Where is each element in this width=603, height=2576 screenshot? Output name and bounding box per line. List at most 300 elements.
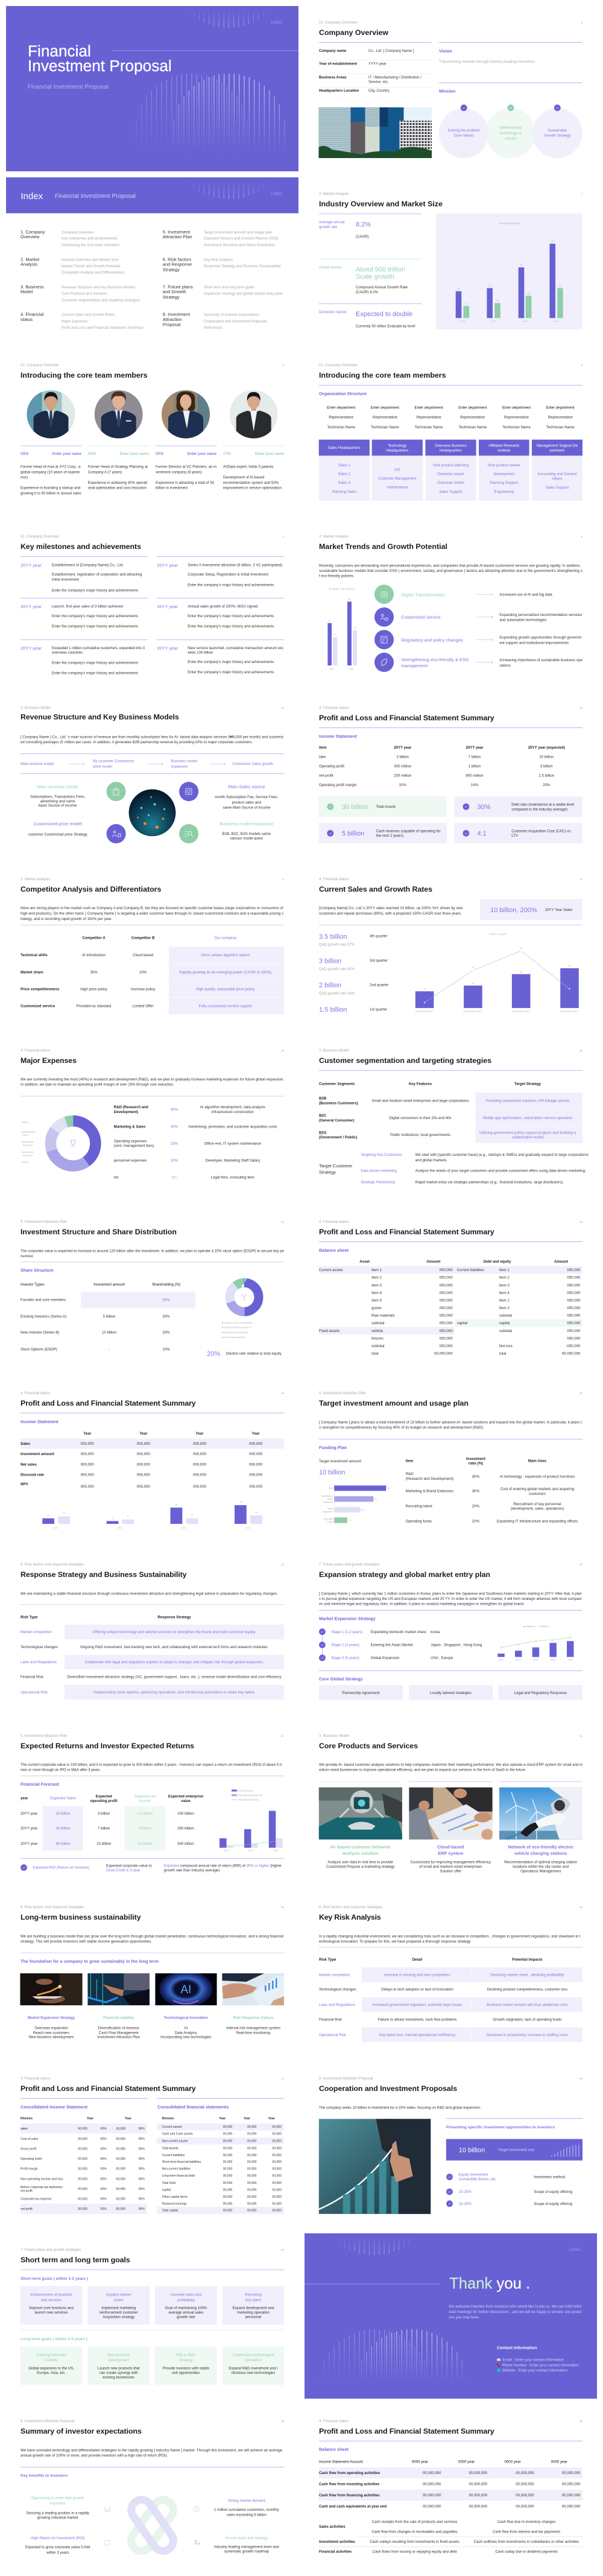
slide: organization structure: 6 — [581, 364, 582, 367]
combo chart: sales and growth: 4th quarter of 20YY — [560, 1010, 579, 1012]
table: consolidated financial: 00,000 — [272, 2188, 282, 2192]
intro paragraph: [ Company Name ] plans to attract a total investment of 10 billion to further advance AI- based solutions and expand into the global market. In particular, it plans t — [319, 1420, 582, 1424]
legend — [222, 1322, 252, 1339]
table: consolidated financial: 00,000 — [247, 2209, 257, 2213]
table: yearly income: 000,000 — [81, 1473, 94, 1477]
text: business model expansion: various model quest — [230, 837, 263, 841]
table: consolidated income: 00% — [139, 2187, 145, 2191]
department table: Enter department — [502, 405, 531, 410]
milestone right 2: Enter the company's major history and achievements — [188, 624, 274, 629]
index left column: Customer segmentation and targeting strategies — [62, 299, 140, 303]
icon: main sales — [179, 782, 198, 801]
table: competitors: Competitor B — [131, 936, 155, 941]
table: segments: B2B — [319, 1097, 327, 1101]
table: income statement — [319, 746, 565, 787]
table: yearly income: 000,000 — [137, 1473, 151, 1477]
table: consolidated financial: 00,000 — [223, 2125, 232, 2129]
table: balance sheet: Debt and equity — [484, 1260, 511, 1264]
table: share structure: 20% — [162, 1331, 170, 1335]
company facts: IT / Manufacturing / Distribution / — [368, 75, 421, 80]
legend: ■ Founders and Core Members — [222, 1322, 252, 1324]
slide: income statement by year: 16 — [281, 1392, 284, 1395]
table: segments: B2C — [319, 1114, 327, 1118]
ROI summary: Expected ROI (Return on Investor) — [33, 1866, 89, 1870]
table: consolidated financial: Current liabilities — [162, 2154, 185, 2157]
closing message: We welcome inquiries from investors who would like to join us. We can hold indivi — [449, 2305, 581, 2309]
index left column: Industry Overview and Market Size — [62, 258, 119, 262]
table: segments — [319, 1082, 582, 1143]
table: consolidated financial: Long-term financial debt — [162, 2174, 195, 2178]
slide: expansion strategy: 27 — [579, 1563, 582, 1566]
table: consolidated income: 00% — [139, 2168, 145, 2171]
table: risks: Decrease in productivity, increase in staffing costs — [487, 2033, 568, 2037]
table: yearly income: 000,000 — [193, 1452, 207, 1456]
mission circles: Core Values — [454, 134, 474, 138]
KPI: cash reserves: the next 2 years) — [376, 834, 403, 838]
KPI: CAC vs LTV: Customer Acquisition Cost (CAC) vs. — [511, 829, 572, 834]
table: consolidated income: 00,000 — [116, 2197, 125, 2201]
table: segments: Target Strategy — [514, 1082, 541, 1087]
org column: management: Accounting and General — [537, 472, 577, 477]
table: balance sheet: total — [371, 1351, 379, 1356]
photo: meeting documents — [409, 1787, 493, 1840]
trend: customized service — [374, 608, 582, 627]
table: expenses: AI algorithm development, data analysis — [200, 1105, 265, 1109]
slide: industry overview: 2. Market Analysis — [319, 192, 349, 196]
strategy boxes: Legal and Regulatory Response — [514, 1691, 567, 1695]
milestone right 3: Enter the company's major history and achievements — [188, 660, 274, 664]
index right column: Strategy — [163, 294, 180, 300]
stat: global market — [319, 265, 408, 294]
decorative domes — [319, 2329, 467, 2414]
combo chart: expansion: 20YY — [499, 1659, 504, 1661]
quarterly figures: 2nd quarter — [370, 983, 388, 987]
table: yearly income: 000,000 — [137, 1485, 151, 1489]
table: consolidated financial: Year — [244, 2117, 250, 2121]
slide: core products: 11 — [579, 1734, 582, 1737]
benefit: market demand: Strong market demand — [228, 2499, 265, 2503]
term: equity scope 2 — [446, 2200, 572, 2207]
timeline stages: Global Expansion — [371, 1656, 400, 1660]
icon: coin — [194, 2506, 199, 2511]
mission circles: Growth Strategy — [544, 134, 571, 138]
term: investment method: Equity Investment — [459, 2172, 488, 2177]
member: CEO: Experience in founding a startup and — [21, 486, 80, 490]
table: risks: Increase in existing and new competitors — [384, 1973, 450, 1977]
table: consolidated income: 00,000 — [116, 2168, 125, 2171]
target customer strategy: Analyze the needs of your target customers and provide customized offers using data-driven marketing. — [415, 1169, 586, 1173]
table: expenses: Developer, Marketing Staff Salary — [205, 1158, 260, 1163]
table: balance sheet: Item 3 — [371, 1283, 382, 1287]
table: income statement: 10% — [399, 783, 406, 787]
KPI: debt ratio: Debt ratio (maintained at a stable level — [511, 802, 574, 807]
stat: domestic market: Domestic market — [319, 310, 347, 314]
interlocked knot — [127, 2496, 177, 2555]
photo: hands with report — [222, 1973, 284, 2005]
table: yearly income: 000,000 — [193, 1473, 207, 1477]
index left column: Model — [21, 289, 33, 294]
photo: AI ring — [155, 1973, 217, 2005]
long-term goals cards: development — [108, 2358, 129, 2362]
table: consolidated financial: 00,000 — [272, 2160, 282, 2164]
table: expenses: infrastructure construction — [212, 1110, 254, 1114]
KPI: total assets: Total Assets — [376, 805, 396, 809]
index right column: References — [204, 326, 223, 330]
bar chart: yearly — [42, 1501, 262, 1529]
slide: investor summary: 28 — [281, 2420, 284, 2423]
slide: core team members: 01. Company Overview — [21, 363, 59, 367]
slide: income statement with KPIs: 15 — [579, 706, 582, 709]
slide: expected returns — [21, 1734, 284, 1873]
term: investment method: Convertible Bonds, etc. — [459, 2177, 497, 2181]
timeline stages: Entering the Asian Market — [371, 1643, 413, 1648]
contact information: Email : Enter your contact information — [503, 2358, 564, 2362]
callout: dilution: 20% — [207, 1350, 220, 1357]
trend: ESG: Increasing importance of sustainable business ope — [499, 658, 583, 662]
short-term goals cards: average annual sales — [168, 2311, 203, 2315]
table: risks: Detail — [412, 1958, 423, 1962]
table: response strategy: Risk Type — [21, 1615, 38, 1619]
index left column: 4. Financial — [21, 312, 44, 317]
benefit: proven team: Industry-leading management team and — [214, 2545, 279, 2549]
activities breakdown: Sales activities — [319, 2525, 346, 2529]
table: balance sheet: 00,000,000 — [434, 1351, 453, 1356]
table: balance sheet — [319, 1260, 582, 1356]
section heading: Market Expansion Strategy — [319, 1616, 376, 1622]
table: income statement: 2.5 billion — [538, 773, 554, 778]
pillar: technological innovation: Technological innovation — [164, 2016, 208, 2020]
table: balance sheet: Item 1 — [499, 1298, 510, 1303]
table: funding uses: 10% — [472, 1520, 480, 1524]
contact information: Website : Enter your contact information — [502, 2368, 567, 2373]
milestone left 2: Launch, first year sales of 3 billion achieved — [52, 604, 123, 609]
mission circles: Differentiated — [500, 126, 522, 130]
slide: thank you — [305, 2233, 597, 2414]
short-term goals cards: profitability — [177, 2298, 195, 2302]
index right column: Attraction — [163, 317, 182, 322]
department table: Representative — [417, 416, 441, 420]
index left column: Company Overview — [62, 230, 94, 235]
legend — [22, 1121, 36, 1163]
activities breakdown: Cash flows from issuing or repaying equity and debt — [373, 2550, 457, 2554]
index right column: 7. Future plans — [163, 284, 193, 290]
table: response strategy: Laws and Regulations — [21, 1660, 57, 1664]
table: expenses: 15% — [171, 1141, 178, 1146]
milestone right 3 — [157, 646, 283, 674]
section heading: income: Consolidated Income Statement — [21, 2104, 88, 2110]
long-term goals cards: existing businesses — [103, 2376, 134, 2379]
company facts: Company name — [319, 49, 347, 53]
member: CEO: global company (10 years of experie — [21, 470, 80, 474]
pillar: market expansion: Overseas expansion — [34, 2026, 68, 2031]
slide: response strategy: 24 — [281, 1563, 284, 1566]
slide: consolidated statements: 4. Financial status — [21, 2076, 50, 2081]
table: consolidated financial: 00,000 — [247, 2181, 257, 2185]
table: consolidated income: 00,000 — [116, 2187, 125, 2191]
pillar: technological innovation: Data Analysis — [175, 2031, 197, 2035]
table: consolidated financial: 00,000 — [223, 2188, 232, 2192]
milestone right 3: 20YY year — [157, 646, 178, 651]
table: income statement: 200 million — [394, 773, 411, 778]
table: balance sheet: 000,000 — [567, 1314, 581, 1318]
heading: Introducing the core team members — [21, 371, 148, 379]
decorative domes — [136, 74, 285, 158]
table: balance sheet: 000,000 — [440, 1276, 453, 1280]
slide: income statement by year: 4. Financial status — [21, 1391, 50, 1395]
activities breakdown: Cash flow from changes in receivables and payables — [371, 2530, 458, 2534]
horizontal bar chart: funding: 20 — [362, 1509, 364, 1511]
index left column: Major Expenses — [62, 319, 88, 323]
milestone left 1: Establishment, registration of corporation and attracting — [52, 573, 142, 577]
timeline stages: Japan , Singapore , Hong Kong — [431, 1643, 482, 1648]
table: cash flow: 00,000,000 — [469, 2505, 488, 2508]
index right column: Proposal — [163, 322, 181, 328]
table: consolidated income: 00% — [100, 2168, 107, 2171]
intro paragraph: The company seeks 10 billion in investment for a 15% stake, focusing on R&D and global expansion. — [319, 2106, 481, 2110]
product: EV charging: Network of eco-friendly electric — [508, 1844, 573, 1850]
table: funding uses: Recruitment of key personnel — [513, 1502, 561, 1506]
legend: Expenses — [23, 1155, 33, 1157]
table: consolidated financial: 00,000 — [223, 2203, 232, 2206]
table: consolidated financial: 00,000 — [223, 2146, 232, 2150]
table: consolidated financial: 00,000 — [247, 2160, 257, 2164]
intro paragraph — [319, 563, 583, 578]
business model flow: Continuous Sales growth — [232, 762, 273, 766]
table: consolidated income: Gross profit — [21, 2147, 37, 2151]
intro paragraph: [ Company Name ] Co., Ltd. 's main sources of revenue are from monthly subscription fees for AI- based data analysis services (₩8,000 per month) and customiz — [21, 735, 283, 739]
table: yearly income: Year — [196, 1432, 204, 1436]
member: COO: Experience in achieving 30% operati — [88, 481, 147, 485]
activities breakdown: Cash receipts from the sale of products and services — [372, 2520, 457, 2524]
short-term goals cards: Enhancement of products — [30, 2292, 72, 2297]
table: expenses: 5% — [171, 1176, 177, 1180]
table: consolidated financial: 00,000 — [272, 2133, 282, 2136]
department table: Representative — [373, 416, 397, 420]
table: balance sheet: capital — [499, 1321, 510, 1325]
combo chart: forecast: Expected Net Income — [238, 1798, 259, 1801]
combo chart: sales and growth: 2nd quarter of 20YY — [463, 1010, 483, 1012]
table: expenses: Office rent, IT system maintenance — [204, 1141, 262, 1146]
long-term goals cards: innovation — [245, 2358, 262, 2362]
heading: Cooperation and Investment Proposals — [319, 2084, 457, 2093]
slide: investment structure — [21, 1220, 285, 1357]
combo chart: sales and growth: ■ sales ─ growth — [490, 933, 506, 935]
slide: market trends — [319, 535, 583, 672]
bar chart: market size: 8 — [466, 303, 467, 305]
quarterly figures: QoQ growth rate 50% — [319, 967, 355, 971]
product: EV charging: Recommendation of optimal charging station — [504, 1860, 577, 1864]
table: share structure: Existing Investors (Series A) — [21, 1315, 66, 1319]
slide: milestones: 4 — [282, 535, 284, 538]
index left column: Key milestones and achievements — [62, 236, 117, 241]
table: balance sheet: Item 1 — [499, 1268, 510, 1272]
table: forecast: 20YY year — [21, 1812, 37, 1816]
table: funding uses: ratio (%) — [469, 1461, 483, 1465]
section heading: Presenting specific investment opportunities to investors — [446, 2125, 555, 2130]
stat: domestic market: Currently 50 trillion Evaluate by level — [356, 325, 415, 328]
table: forecast: Expected net — [134, 1794, 156, 1798]
table: balance sheet: Net loss — [499, 1344, 513, 1348]
benefit: ROI: within 3 years — [46, 2551, 69, 2555]
milestone left 1 — [21, 563, 142, 592]
heading: Customer segmentation and targeting strategies — [319, 1056, 491, 1065]
slide: expansion strategy — [319, 1562, 582, 1700]
table: share structure: Stock Options (ESOP) — [21, 1348, 57, 1351]
table: income statement: 15 billion — [539, 755, 554, 759]
table: balance sheet: Fixed assets — [319, 1329, 339, 1333]
target customer strategy: Target Customer — [319, 1163, 353, 1169]
table: consolidated income: 00% — [139, 2197, 145, 2201]
business model flow: price model — [93, 765, 112, 769]
bar chart: yearly: 10 — [191, 1514, 193, 1517]
cover subtitle: Financial Investment Proposal — [28, 84, 109, 90]
department table: Technician Name — [546, 425, 575, 430]
bar chart: yearly: 5 — [112, 1517, 113, 1519]
product: ERP — [411, 1844, 491, 1874]
table: cash flow: 0000 year — [458, 2460, 475, 2464]
stat: CAGR: growth rate — [319, 225, 338, 229]
org column: research — [479, 440, 529, 501]
slide: key risk analysis — [319, 1905, 582, 2042]
table: balance sheet: Amount — [554, 1260, 568, 1264]
table: consolidated income: Operating profit — [21, 2157, 42, 2161]
milestone left 2: 20YY year — [21, 604, 42, 609]
bar chart: trends: year — [350, 668, 354, 670]
org column: management — [532, 440, 582, 501]
logo: LOGO — [271, 21, 282, 25]
table: cash flow: 00,000,000 — [562, 2505, 581, 2508]
table: balance sheet: 000,000 — [567, 1291, 581, 1295]
long-term goals cards: IPO or M&A — [176, 2353, 197, 2358]
bar chart: trends — [327, 588, 357, 670]
slide: expected returns: 21 — [281, 1734, 284, 1737]
term: equity scope 1: Scope of equity offering — [534, 2190, 572, 2194]
heading: Profit and Loss and Financial Statement Summary — [319, 1228, 494, 1236]
activities breakdown: Cash flow due to inventory changes — [497, 2520, 555, 2524]
bar chart: market size: 20 — [559, 285, 561, 287]
quarterly figures: 1.5 billion — [319, 1006, 347, 1014]
index right column: Strategy — [163, 267, 180, 272]
bar chart: yearly: year — [246, 1526, 251, 1529]
table: consolidated income: 00,000 — [78, 2137, 87, 2141]
table: balance sheet: 000,000 — [440, 1314, 453, 1318]
index right column: Key Risk Analysis — [204, 258, 233, 262]
heading: Target investment amount and usage plan — [319, 1399, 469, 1407]
slide: organization structure — [319, 363, 582, 501]
intro paragraph: es and minimize legal and regulatory risks. In addition, it plans to conduct marketing campaigns to strengthen its global brand. — [319, 1602, 525, 1606]
closing message: dual meetings for further discussions , and we will be happy to answer any questi — [449, 2310, 581, 2314]
table: consolidated income: 00,000 — [116, 2177, 125, 2181]
timeline stages: Stage 2 (3 years) — [331, 1643, 359, 1648]
table: forecast: 500 billion — [177, 1842, 194, 1846]
KPI: CAC vs LTV: LTV — [511, 834, 519, 838]
intro paragraph — [319, 1591, 582, 1606]
slide: response strategy: 6. Risk factors and response strategies — [21, 1562, 84, 1567]
department table: Technician Name — [458, 425, 487, 430]
table: risks: Failure to attract investment, cash flow problems — [378, 2018, 456, 2022]
department table: Representative — [329, 416, 354, 420]
combo chart: forecast — [219, 1789, 283, 1852]
table: competitors: High price policy — [80, 987, 108, 992]
table: consolidated financial: 00,000 — [223, 2168, 232, 2171]
table: consolidated income: 00,000 — [116, 2127, 125, 2131]
table: yearly income: 000,000 — [137, 1462, 151, 1467]
table: competitors: Provided as standard — [77, 1004, 111, 1009]
table: consolidated financial: 00,000 — [247, 2195, 257, 2199]
table: risks: Technological changes — [319, 1988, 356, 1992]
bar chart: yearly: 10 — [47, 1514, 49, 1517]
heading: Industry Overview and Market Size — [319, 200, 443, 208]
combo chart: expansion: 20YY — [516, 1659, 522, 1661]
table: response strategy: Response Strategy — [157, 1615, 191, 1619]
slide: company overview: 3 — [581, 21, 582, 24]
table: balance sheet: 000,000 — [567, 1306, 581, 1310]
KPI: cash reserves — [319, 823, 447, 843]
org column: overseas: Overseas orders — [437, 481, 464, 485]
vision: Vision — [439, 48, 452, 54]
pillar: financial stability: Financial stability — [103, 2016, 134, 2020]
trend: digital transformation: Increased use of AI and big data — [499, 592, 552, 597]
table: yearly income: Year — [139, 1432, 148, 1436]
table: competitors: Customized service — [21, 1004, 55, 1009]
slide: income statement with KPIs: 4. Financial status — [319, 706, 349, 710]
heading: Expansion strategy and global market entry plan — [319, 1570, 490, 1579]
table: consolidated financial: 00,000 — [272, 2209, 282, 2213]
slide: key risk analysis: 6. Risk factors and response strategies — [319, 1905, 382, 1909]
product: ERP: Solution offer — [440, 1870, 461, 1874]
table: consolidated income: 00,000 — [78, 2168, 87, 2171]
table: income statement: 800 million — [466, 773, 484, 778]
table: funding uses: Cost of entering global markets and acquiring — [500, 1487, 574, 1491]
org column: technology: A/S — [394, 468, 400, 472]
table: funding uses — [406, 1457, 578, 1524]
table: funding uses: Recruiting talent — [406, 1505, 432, 1508]
milestone right 2: 20YY year — [157, 604, 178, 609]
index header band: LOGO — [271, 192, 282, 196]
legend: ■ Stock Options (ESOP) — [222, 1336, 245, 1339]
bar chart: market size: 34 — [520, 264, 522, 267]
stat: CAGR: 8.2% — [356, 221, 371, 228]
callout: target size: 10 billion — [459, 2147, 485, 2154]
table: forecast: 7 billion — [98, 1827, 110, 1831]
legend: ■ Personnel — [22, 1151, 34, 1153]
short-term goals cards: Acquisition strategy — [103, 2315, 135, 2320]
index left column: Introducing the core team members — [62, 243, 119, 247]
slide: target investment — [319, 1391, 582, 1525]
text: business model expansion: B2B, B2C, B2G models same — [223, 832, 271, 836]
slide: competitor analysis — [21, 877, 284, 1015]
intro paragraph: The corporate value is expected to increase to around 120 billion after the investment. In addition, we plan to operate a 10% stock option (ESOP) to secure key pe — [21, 1249, 285, 1253]
photo: robot on tablet — [318, 1787, 402, 1840]
combo chart: sales and growth: 33 — [472, 966, 474, 969]
benefit: proven team — [214, 2536, 279, 2554]
table: risks: Delays in tech adoption or lack of innovation — [381, 1988, 453, 1992]
term: equity scope 2: 15-20% — [459, 2202, 472, 2206]
table: funding uses: customers — [529, 1492, 546, 1496]
logo: LOGO — [569, 2248, 580, 2252]
company facts: Business Areas — [319, 75, 347, 80]
member: COO: Company A (7 years) — [88, 470, 122, 474]
trend: ESG: Strengthening eco-friendly & ESG — [401, 657, 469, 662]
benefit: proven team: systematic growth roadmap — [224, 2549, 270, 2554]
table: cash flow: 0000 year — [505, 2460, 521, 2464]
table: funding uses: Operating funds — [406, 1520, 432, 1524]
table: cash flow: 00,000,000 — [469, 2471, 488, 2475]
intro paragraph: [ Company Name ], which currently has 1 million customers in Korea, plans to enter the Japanese and Southeast Asian markets starting in 20YY. After that, it plan — [319, 1591, 582, 1596]
timeline stages: Stage 3 (5 years) — [331, 1656, 359, 1660]
section heading: Key benefits to investors — [21, 2473, 68, 2478]
table: yearly income: 000,000 — [249, 1485, 263, 1489]
